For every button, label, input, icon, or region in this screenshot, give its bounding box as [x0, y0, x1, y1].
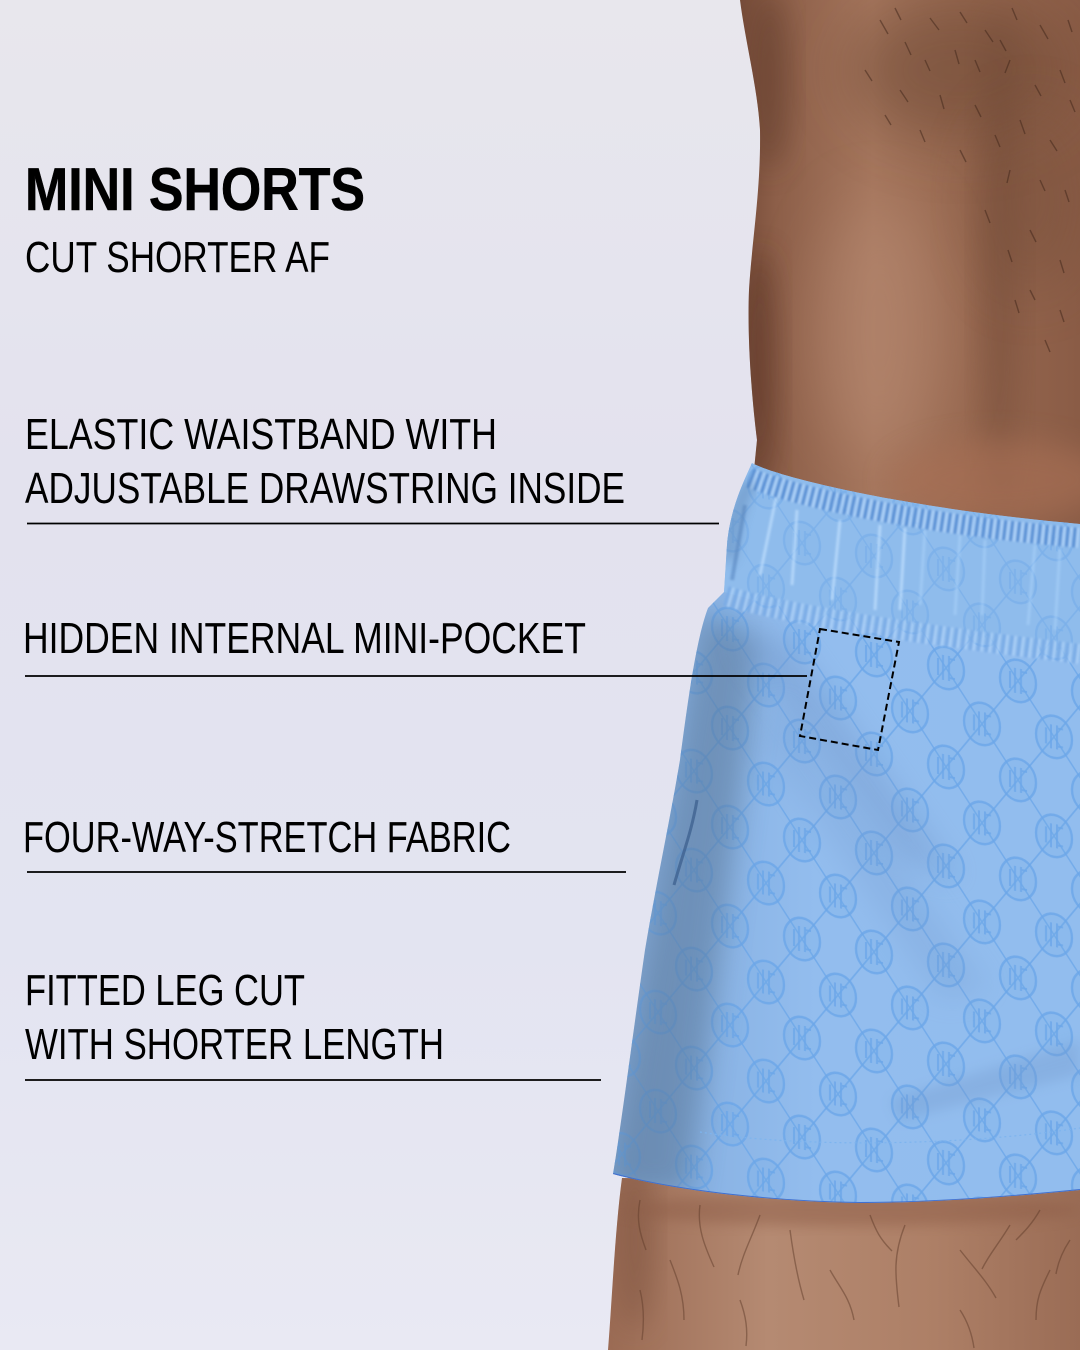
- callout: leg cut: [25, 966, 601, 1080]
- hem edge: [613, 1174, 1080, 1203]
- monogram print: [600, 455, 1080, 1210]
- hem stitching: [700, 1128, 1080, 1143]
- shorts fabric: [600, 455, 1080, 1210]
- waistband: [724, 463, 1080, 660]
- callout: pocket: HIDDEN INTERNAL MINI-POCKET: [23, 614, 586, 663]
- callout: fabric: FOUR-WAY-STRETCH FABRIC: [23, 813, 511, 862]
- fabric shading: [610, 610, 1080, 1195]
- callout: leg cut: WITH SHORTER LENGTH: [25, 1020, 444, 1069]
- callout: leg cut: FITTED LEG CUT: [25, 966, 305, 1015]
- title: MINI SHORTS: [25, 156, 365, 223]
- hidden pocket dashed outline: [800, 629, 899, 750]
- mini shorts garment: [600, 455, 1080, 1210]
- model thigh: [608, 1178, 1080, 1350]
- model torso: [735, 0, 1080, 560]
- callout: waistband: [25, 410, 719, 524]
- subtitle: CUT SHORTER AF: [25, 233, 330, 282]
- heading: [25, 156, 365, 282]
- callout: waistband: ELASTIC WAISTBAND WITH: [25, 410, 497, 459]
- callout: waistband: ADJUSTABLE DRAWSTRING INSIDE: [25, 464, 625, 513]
